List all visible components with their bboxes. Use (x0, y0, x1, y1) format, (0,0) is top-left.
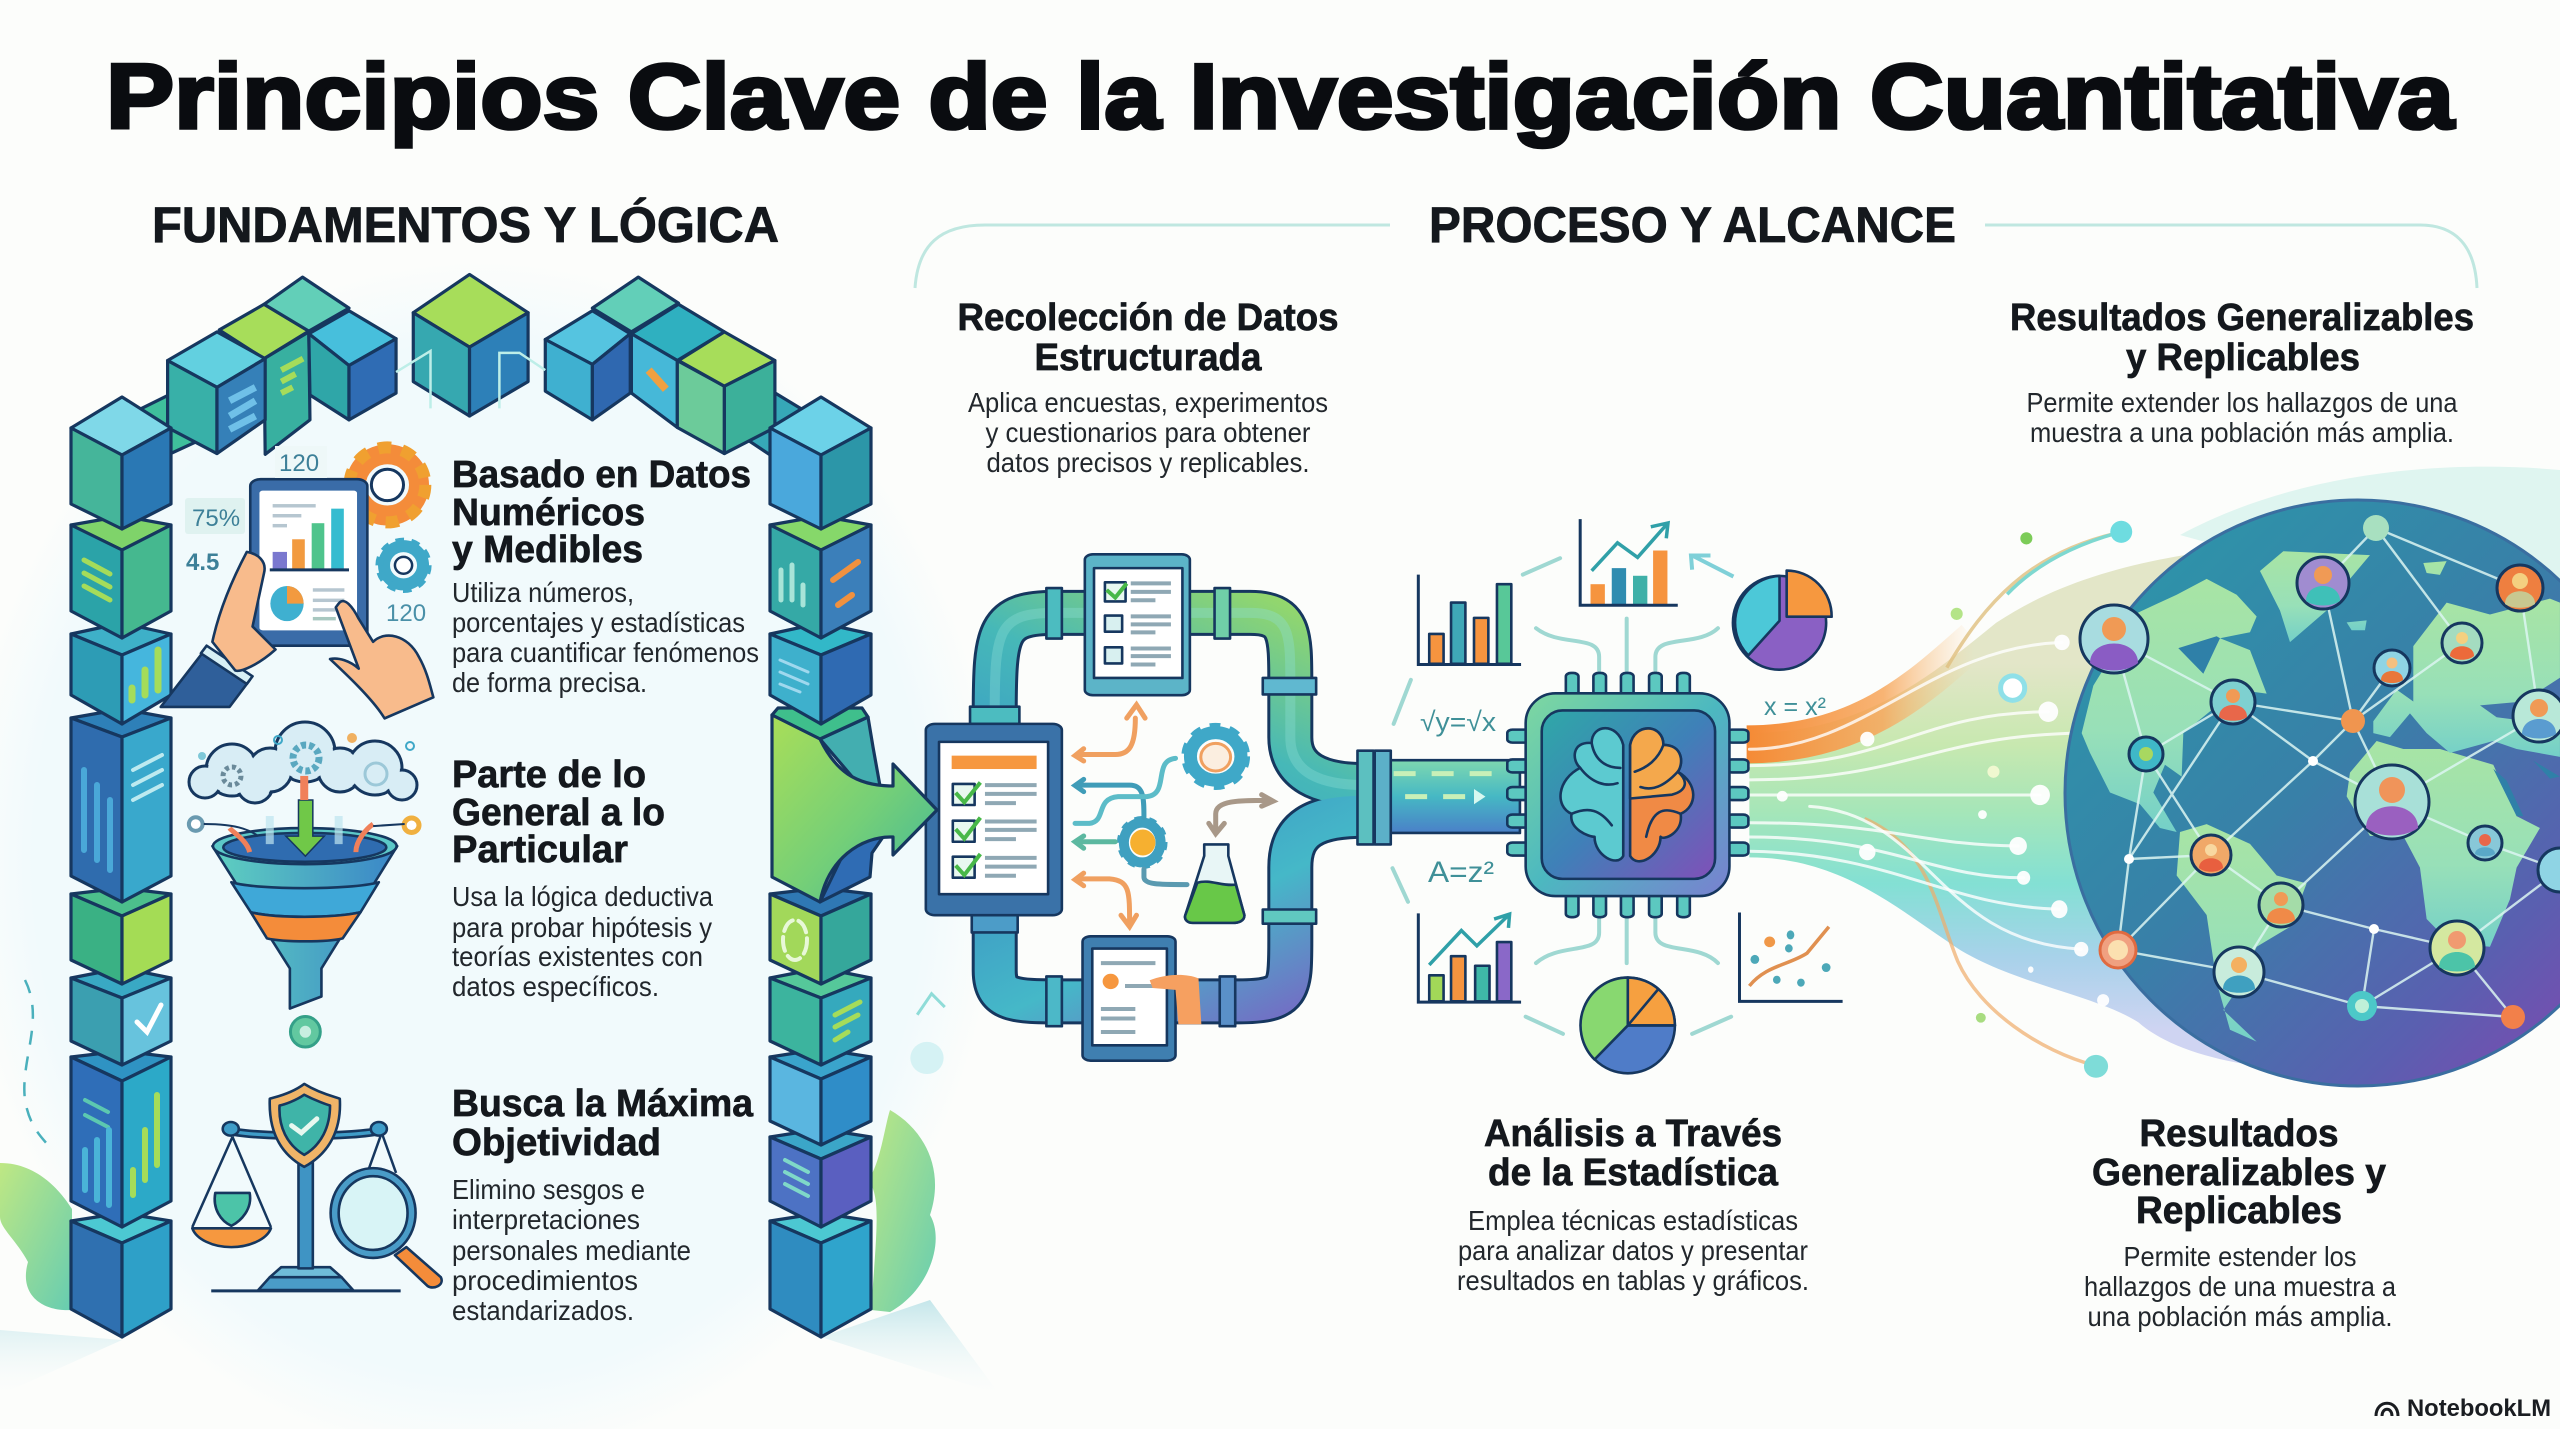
item 3: text: Busca la Máxima (452, 1083, 754, 1125)
icon: blue gear (379, 542, 428, 589)
chart: bars with trend arrow (1580, 519, 1733, 605)
chart: pie bottom (1581, 978, 1675, 1073)
icon: brain (1561, 728, 1693, 861)
item 2: text: datos específicos. (452, 971, 659, 1002)
data stream to globe (1747, 533, 2276, 1068)
right column upper cubes (770, 397, 871, 724)
icon: shield (270, 1084, 340, 1167)
icon: sleeve (161, 646, 253, 707)
arrow: block leading into process (772, 708, 937, 902)
text: resultados generalizables superior: muestra a una población más amplia. (2030, 417, 2454, 448)
person nodes (2080, 557, 2560, 997)
left column details (84, 560, 162, 1205)
item 2: text: Parte de lo (452, 754, 646, 796)
globe sphere (2065, 500, 2560, 1086)
tablet: top checklist (1085, 554, 1190, 695)
text: resultados generalizables inferior: Resultados (2140, 1113, 2338, 1155)
math labels: A=z² (1428, 856, 1494, 889)
text: análisis estadístico: de la Estadística (1488, 1152, 1779, 1194)
item 1: text: Utiliza números, (452, 577, 634, 608)
icon: funnel (212, 828, 397, 1009)
panel: cube arch (71, 274, 937, 1337)
text: análisis estadístico: resultados en tablas y gráficos. (1457, 1265, 1809, 1296)
item 2: text: para probar hipótesis y (452, 912, 712, 943)
text: resultados generalizables superior (2010, 297, 2474, 448)
icon: hands (212, 552, 433, 718)
item 3: text: estandarizados. (452, 1295, 634, 1326)
icon: flask (1185, 844, 1244, 923)
icon: side dots (189, 817, 203, 831)
heading: proceso y alcance: PROCESO Y ALCANCE (1429, 197, 1956, 253)
icon: scale stand (192, 1122, 401, 1291)
tablet: bottom form with hand (1083, 936, 1201, 1061)
text: recolección de datos: Estructurada (1034, 337, 1262, 379)
decorative marks (917, 994, 945, 1015)
panel: analysis stream (1747, 521, 2276, 1078)
item 1: text: de forma precisa. (452, 667, 647, 698)
text: análisis estadístico (1457, 1113, 1809, 1296)
chart: scatter (1739, 912, 1843, 1001)
text: resultados generalizables inferior: Generalizables y (2092, 1152, 2386, 1194)
right cube column (770, 888, 871, 1337)
math labels: x = x² (1764, 693, 1826, 721)
text: recolección de datos: datos precisos y replicables. (986, 447, 1310, 478)
title: Principios Clave de la Investigación Cuantitativa (106, 46, 2455, 148)
item 1: number labels: 120 (279, 450, 319, 477)
item 1: text: Numéricos (452, 492, 645, 534)
icon: gear top (1186, 727, 1246, 785)
text: resultados generalizables inferior: Replicables (2136, 1190, 2342, 1232)
text: recolección de datos: Recolección de Datos (958, 297, 1338, 339)
text: recolección de datos: Aplica encuestas, experimentos (968, 387, 1328, 418)
chart: orange teal bars (1418, 575, 1521, 665)
small network nodes (2100, 515, 2525, 1029)
chip body (1526, 693, 1729, 896)
text: recolección de datos: y cuestionarios para obtener (986, 417, 1310, 448)
math labels: √y=√x (1420, 707, 1497, 737)
text: análisis estadístico: para analizar datos y presentar (1458, 1235, 1808, 1266)
icon: drop ball (290, 1017, 320, 1047)
flow lines and dots (1749, 521, 2132, 1078)
text: análisis estadístico: Análisis a Través (1484, 1113, 1782, 1155)
item 1: text: porcentajes y estadísticas (452, 607, 745, 638)
text: resultados generalizables inferior (2084, 1113, 2396, 1332)
icon: gear small (1120, 820, 1164, 865)
item 1: number labels (185, 446, 426, 627)
item 2: text: General a lo (452, 792, 665, 834)
pipes (995, 613, 1365, 1001)
item 3: text: personales mediante (452, 1235, 691, 1266)
chart: pie upper right (1733, 571, 1843, 1001)
icon: clouds (189, 722, 417, 803)
heading: fundamentos y lógica: FUNDAMENTOS Y LÓGICA (152, 197, 779, 253)
item 2: clouds and funnel illustration (189, 722, 419, 1047)
circuit traces on top cube (230, 351, 666, 429)
item 3: text: procedimientos (452, 1265, 638, 1296)
text: resultados generalizables superior: y Replicables (2126, 337, 2360, 379)
network lines (2114, 528, 2560, 1017)
math labels (1420, 693, 1826, 889)
arrows between icons (1075, 705, 1273, 927)
text: resultados generalizables inferior: Permite estender los (2124, 1241, 2356, 1272)
decorative leaves (0, 980, 936, 1312)
output pipe (1371, 760, 1520, 833)
text: resultados generalizables inferior: hallazgos de una muestra a (2084, 1271, 2396, 1302)
text: resultados generalizables superior: Resultados Generalizables (2010, 297, 2474, 339)
chip pins (1507, 673, 1748, 917)
item 1: data illustration (161, 447, 433, 718)
icon: scale pan (192, 1193, 271, 1247)
item 1: number labels: 120 (386, 600, 426, 627)
notebooklm badge: NotebookLM (2407, 1395, 2551, 1422)
item 1: number labels: 4.5 (186, 549, 219, 576)
text: análisis estadístico: Emplea técnicas estadísticas (1468, 1205, 1798, 1236)
icon: orange gear (350, 447, 425, 522)
item 3: text (452, 1083, 754, 1326)
panel: globe (2065, 500, 2560, 1086)
text: resultados generalizables superior: Permite extender los hallazgos de una (2026, 387, 2458, 418)
item 1: text: Basado en Datos (452, 454, 751, 496)
item 3: text: interpretaciones (452, 1204, 640, 1235)
chip connectors (1392, 558, 1731, 1034)
item 1: text (452, 454, 759, 698)
continents (2082, 551, 2560, 1042)
left cube column (71, 397, 171, 1337)
flanges (970, 588, 1391, 1026)
item 1: number labels: 75% (192, 505, 240, 532)
item 2: text: Usa la lógica deductiva (452, 881, 713, 912)
item 2: text (452, 754, 713, 1002)
bracket: proceso y alcance (915, 225, 2477, 288)
item 2: text: Particular (452, 829, 628, 871)
item 2: text: teorías existentes con (452, 941, 703, 972)
right column details (780, 562, 860, 1196)
top row of cubes (138, 274, 804, 458)
text: recolección de datos (958, 297, 1338, 478)
panel: chip with brain (1392, 519, 1748, 1073)
icon: down arrow (286, 800, 324, 856)
tablet: main survey form (926, 724, 1062, 915)
item 3: text: Objetividad (452, 1122, 661, 1164)
item 3: scale illustration (192, 1084, 442, 1291)
item 3: text: Elimino sesgos e (452, 1174, 645, 1205)
icon: magnifier (331, 1168, 442, 1287)
chart: rising bars bottom (1418, 913, 1521, 1002)
item 1: text: y Medibles (452, 529, 643, 571)
text: resultados generalizables inferior: una población más amplia. (2088, 1301, 2392, 1332)
icon: tablet with chart (250, 479, 367, 646)
panel: data collection pipeline (910, 554, 1520, 1074)
item 1: text: para cuantificar fenómenos (452, 637, 759, 668)
